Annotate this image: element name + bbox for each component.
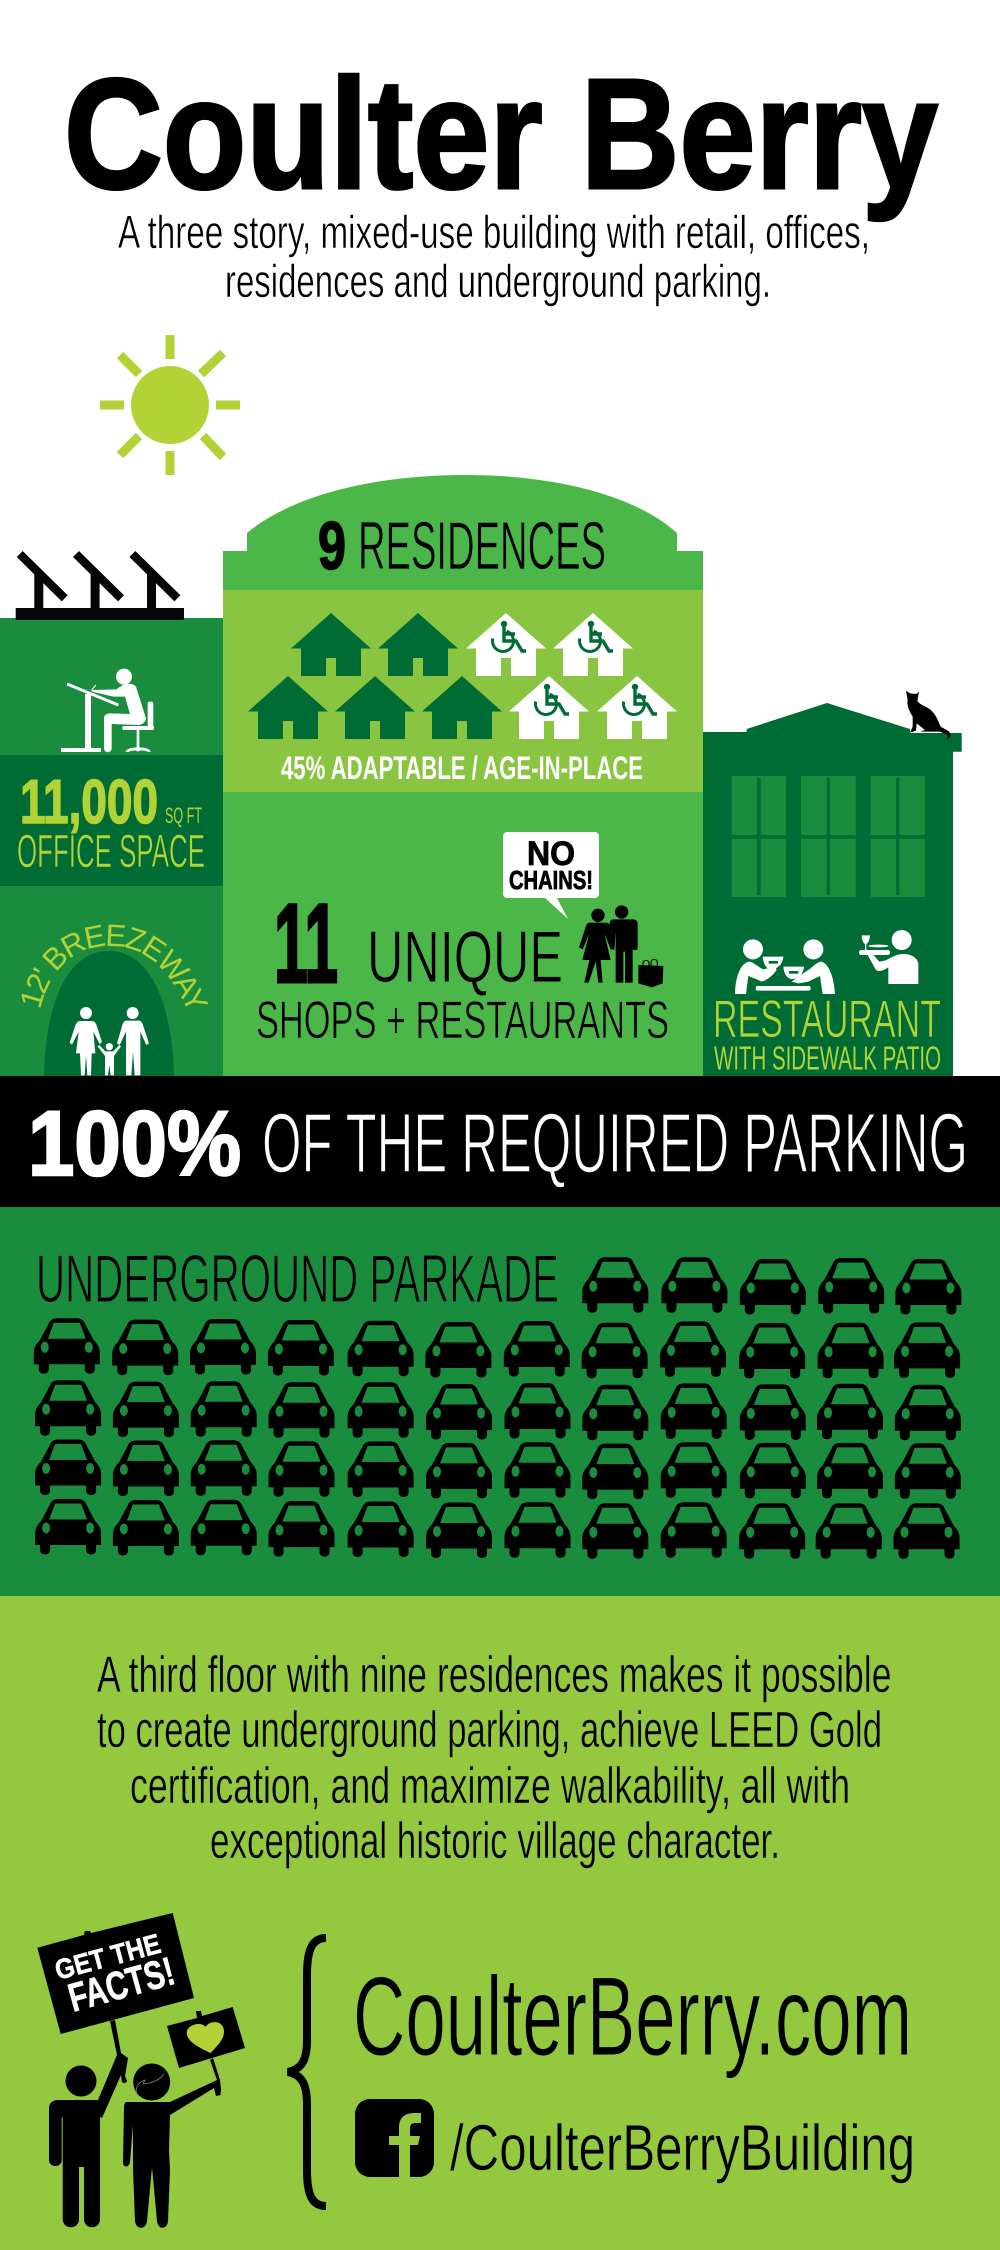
summary paragraph — [97, 1646, 892, 1869]
panel: centre residential and retail building — [223, 475, 703, 1076]
residences heading — [318, 508, 606, 584]
unique shops text: UNIQUE — [367, 917, 563, 998]
head: woman — [133, 2064, 170, 2100]
breezeway tunnel — [44, 951, 174, 1076]
icon: worker at drafting table — [61, 669, 154, 752]
head: man — [66, 2066, 96, 2096]
icons: adaptable houses — [466, 613, 677, 739]
panel: footer — [0, 1596, 1000, 2250]
icon: solar panels — [16, 554, 184, 620]
breezeway label: 12' BREEZEWAY — [22, 924, 208, 1008]
callout: no chains — [503, 832, 599, 919]
windows — [732, 776, 925, 897]
parkade label: UNDERGROUND PARKADE — [36, 1241, 559, 1317]
callout: no chains: CHAINS! — [509, 865, 593, 895]
panel: right restaurant building — [703, 691, 962, 1076]
icon: family — [70, 1007, 149, 1075]
unique shops text — [256, 881, 669, 1050]
subtitle — [118, 206, 870, 307]
panel: parking banner — [0, 1076, 1000, 1207]
icons: houses — [248, 613, 502, 739]
residences band — [223, 590, 703, 792]
callout: no chains: NO — [527, 835, 575, 873]
icon: protesters with signs — [37, 1913, 245, 2228]
sign: heart — [167, 2007, 245, 2068]
figure: woman — [123, 2058, 221, 2228]
icons: parked cars — [34, 1257, 961, 1559]
sign: get the facts: FACTS! — [64, 1949, 179, 2021]
residences heading: RESIDENCES — [358, 508, 606, 584]
panel: left office building — [0, 551, 223, 1076]
icon: sun — [100, 335, 240, 475]
bracket — [288, 1938, 326, 2206]
office space band — [0, 755, 223, 886]
icon: diners and server — [735, 930, 918, 994]
office space figure: SQ FT — [165, 803, 202, 828]
icon: cat — [906, 691, 951, 739]
sign: get the facts — [37, 1913, 194, 2034]
office space figure — [17, 768, 205, 877]
figure: man — [49, 2020, 128, 2227]
unique shops text: SHOPS + RESTAURANTS — [256, 991, 669, 1050]
office space figure: 11,000 — [20, 768, 158, 837]
subtitle: residences and underground parking. — [225, 255, 771, 307]
residences heading: 9 — [318, 508, 346, 584]
adaptable label: 45% ADAPTABLE / AGE-IN-PLACE — [281, 750, 643, 786]
sign: get the facts: GET THE — [52, 1928, 164, 1986]
restaurant label — [713, 990, 941, 1076]
unique shops text: 11 — [274, 881, 338, 1006]
panel: parking banner: 100% — [28, 1093, 241, 1195]
office space figure: OFFICE SPACE — [17, 825, 205, 877]
icon: shoppers — [579, 905, 663, 987]
panel: underground parkade — [0, 1207, 1000, 1596]
icon: facebook — [355, 2099, 434, 2177]
